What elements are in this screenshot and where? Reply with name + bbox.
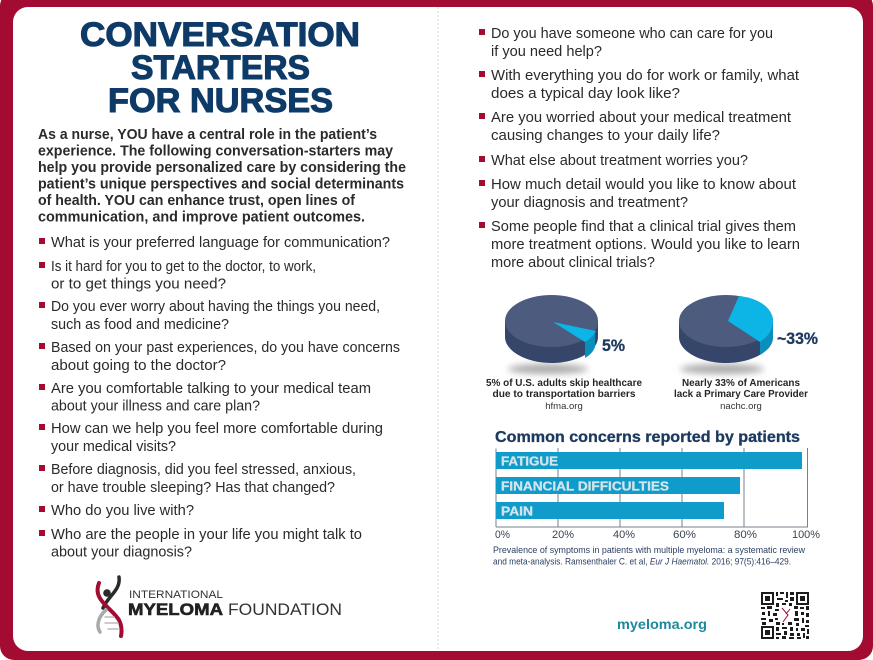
bar: pain [496, 502, 724, 519]
pie chart: 5% transportation: hfma.org [545, 401, 583, 412]
right question list: if you need help? [491, 44, 602, 60]
right question list: your diagnosis and treatment? [491, 195, 688, 211]
website: myeloma.org [617, 616, 707, 632]
logo: International Myeloma Foundation: FOUNDATION [228, 600, 342, 619]
right question list: How much detail would you like to know about [491, 177, 796, 193]
intro paragraph [38, 126, 406, 226]
icon: QR code [761, 592, 809, 639]
right question list: more treatment options. Would you like to learn [491, 237, 800, 253]
bar chart: common concerns: 60% [673, 529, 696, 541]
logo: International Myeloma Foundation: INTERNATIONAL [129, 589, 223, 601]
left question list: Before diagnosis, did you feel stressed, anxious, [51, 462, 356, 478]
right question list: causing changes to your daily life? [491, 128, 720, 144]
citation [493, 544, 805, 566]
right question list: Are you worried about your medical treatment [491, 110, 791, 126]
intro paragraph: patient’s unique perspectives and social determinants [38, 176, 404, 192]
left question list: or have trouble sleeping? Has that changed? [51, 480, 335, 496]
left question list: about your diagnosis? [51, 544, 192, 560]
left question list: such as food and medicine? [51, 317, 229, 333]
citation: Prevalence of symptoms in patients with multiple myeloma: a systematic review [493, 544, 805, 555]
pie chart: 33% primary care: Nearly 33% of Americans [682, 377, 800, 389]
left question list: Who are the people in your life you might talk to [51, 527, 362, 543]
citation: and meta-analysis. Ramsenthaler C. et al, Eur J Haematol. 2016; 97(5):416–429. [493, 556, 791, 566]
bar chart: common concerns: FINANCIAL DIFFICULTIES [501, 480, 669, 494]
left question list: Based on your past experiences, do you have concerns [51, 340, 400, 356]
left question list: Are you comfortable talking to your medical team [51, 381, 371, 397]
intro paragraph: communication, and improve patient outcomes. [38, 208, 365, 226]
pie chart: 5% transportation: 5% of U.S. adults skip healthcare [486, 377, 642, 389]
bar chart: common concerns [495, 429, 820, 541]
right question list: What else about treatment worries you? [491, 153, 748, 169]
left question list: your medical visits? [51, 439, 176, 455]
left question list: about your illness and care plan? [51, 398, 260, 414]
left question list: What is your preferred language for communication? [51, 235, 390, 251]
right question list: With everything you do for work or family, what [491, 68, 799, 84]
axis labels: 0% [495, 529, 510, 541]
intro paragraph: of health. YOU can enhance trust, open lines of [38, 192, 356, 209]
bar chart: common concerns: 80% [734, 529, 757, 541]
pie chart: 33% primary care: nachc.org [720, 401, 762, 412]
right question list: Some people find that a clinical trial gives them [491, 219, 796, 235]
bar chart: common concerns: 40% [613, 529, 635, 541]
bar chart: common concerns: 20% [552, 529, 574, 541]
intro paragraph: help you provide personalized care by considering the [38, 159, 406, 176]
bar chart: common concerns: PAIN [501, 504, 533, 518]
icon: helix figure [98, 577, 122, 636]
title: STARTERS [131, 49, 310, 87]
right question list: Do you have someone who can care for you [491, 26, 773, 42]
logo: International Myeloma Foundation [98, 577, 342, 636]
bar chart: common concerns: FATIGUE [501, 454, 558, 468]
title: CONVERSATION [80, 16, 360, 54]
pie chart: 33% primary care [674, 295, 818, 412]
pie chart: 33% primary care: lack a Primary Care Provider [674, 388, 808, 400]
bar: fatigue [496, 452, 802, 469]
right question list: does a typical day look like? [491, 86, 680, 102]
left question list: Who do you live with? [51, 503, 194, 519]
left question list: Do you ever worry about having the things you need, [51, 299, 380, 315]
value label: 5% [602, 336, 625, 355]
right question list [479, 26, 800, 271]
left question list: about going to the doctor? [51, 358, 226, 374]
pie chart: 5% transportation: due to transportation barriers [492, 388, 636, 400]
left question list: or to get things you need? [51, 276, 226, 292]
left question list: Is it hard for you to get to the doctor, to work, [51, 259, 316, 275]
bar: financial difficulties [496, 477, 740, 494]
right question list: more about clinical trials? [491, 255, 655, 271]
intro paragraph: As a nurse, YOU have a central role in the patient’s [38, 126, 377, 143]
title [80, 16, 360, 120]
intro paragraph: experience. The following conversation-starters may [38, 142, 394, 160]
bar chart: common concerns: 100% [792, 529, 820, 541]
logo: International Myeloma Foundation: MYELOMA [128, 600, 223, 619]
title: FOR NURSES [108, 82, 333, 120]
chart heading: Common concerns reported by patients [495, 429, 800, 446]
value label: ~33% [777, 329, 818, 348]
left question list [39, 235, 400, 560]
left question list: How can we help you feel more comfortable during [51, 421, 383, 437]
pie chart: 5% transportation [486, 295, 642, 412]
